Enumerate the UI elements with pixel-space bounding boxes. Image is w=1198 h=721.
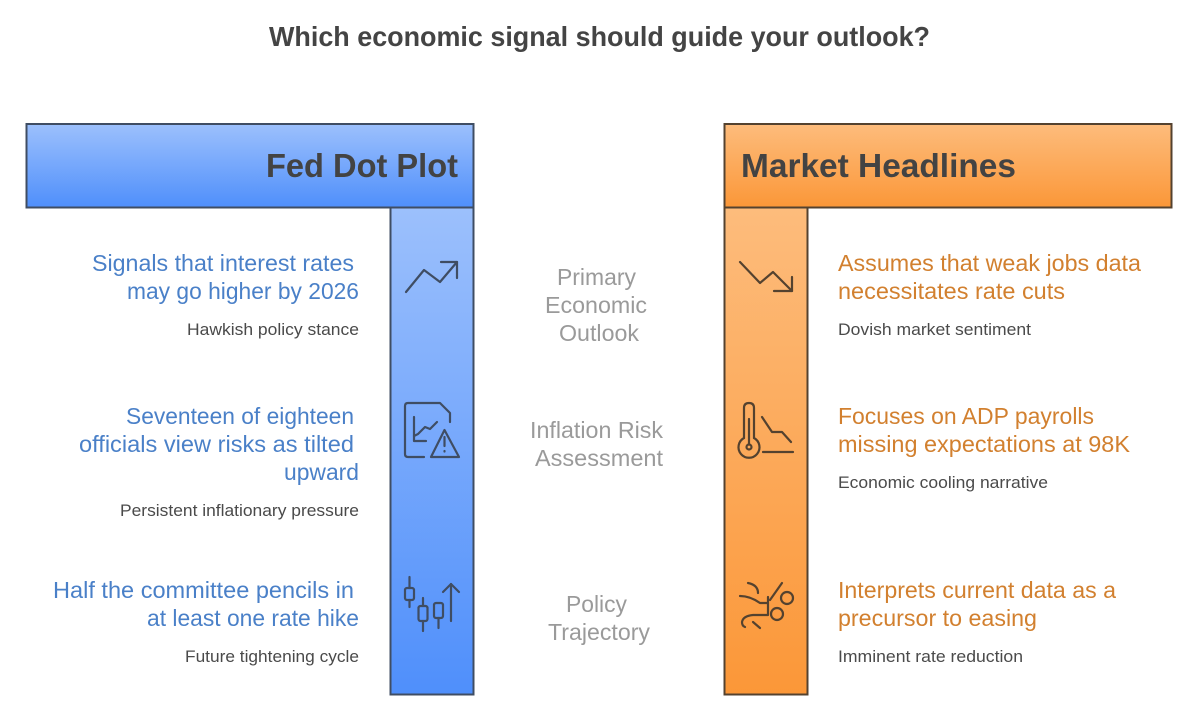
text block: rates higher: Hawkish policy stance (187, 320, 359, 339)
text block: half the committee (53, 577, 359, 666)
label: Policy Trajectory: Policy (566, 591, 627, 617)
label: Inflation Risk Assessment (530, 417, 664, 471)
icon: chart document with warning (405, 403, 459, 457)
icon: candlesticks with up arrow (405, 577, 459, 631)
label: Primary Economic Outlook: Outlook (559, 320, 640, 346)
panel: Fed Dot Plot (26, 124, 474, 694)
text block: ADP payrolls (838, 403, 1131, 492)
icon: percent with swirling lines (740, 583, 793, 628)
blue vertical bar (390, 207, 474, 694)
label: Primary Economic Outlook: Primary (557, 264, 636, 290)
text block: ADP payrolls: missing expectations at 98K (838, 431, 1131, 457)
text block: ADP payrolls: Focuses on ADP payrolls (838, 403, 1094, 429)
blue header bar (26, 124, 474, 208)
panel: Market Headlines (724, 124, 1172, 694)
orange vertical bar (724, 207, 808, 694)
label: Primary Economic Outlook: Economic (545, 292, 647, 318)
heading: Market Headlines: Market Headlines (741, 147, 1016, 184)
text block: half the committee: Future tightening cycle (185, 647, 359, 666)
text block: weak jobs data (838, 250, 1141, 339)
label: Policy Trajectory: Trajectory (548, 619, 651, 645)
orange header bar (724, 124, 1172, 208)
panel: center criteria (530, 264, 664, 645)
title: Which economic signal should guide your outlook? (269, 21, 930, 52)
text block: seventeen of eighteen: officials view risks as tilted (79, 431, 354, 457)
text block: precursor to easing: Imminent rate reduction (838, 647, 1023, 666)
text block: precursor to easing (838, 577, 1116, 666)
label: Primary Economic Outlook (545, 264, 647, 346)
icon: rising trend arrow (406, 262, 457, 292)
text block: weak jobs data: Dovish market sentiment (838, 320, 1031, 339)
text block: half the committee: at least one rate hike (147, 605, 359, 631)
text block: seventeen of eighteen: Persistent inflationary pressure (120, 501, 359, 520)
heading: Fed Dot Plot: Fed Dot Plot (266, 147, 458, 184)
text block: seventeen of eighteen: Seventeen of eighteen (126, 403, 354, 429)
text block: ADP payrolls: Economic cooling narrative (838, 473, 1048, 492)
text block: weak jobs data: Assumes that weak jobs data (838, 250, 1141, 276)
text block: seventeen of eighteen: upward (284, 459, 359, 485)
text block: precursor to easing: Interprets current data as a (838, 577, 1116, 603)
label: Inflation Risk Assessment: Inflation Risk (530, 417, 663, 443)
label: Inflation Risk Assessment: Assessment (535, 445, 664, 471)
text block: rates higher (92, 250, 359, 339)
text block: rates higher: may go higher by 2026 (127, 278, 359, 304)
text block: precursor to easing: precursor to easing (838, 605, 1037, 631)
text block: rates higher: Signals that interest rates (92, 250, 354, 276)
text block: half the committee: Half the committee pencils in (53, 577, 354, 603)
text block: seventeen of eighteen (79, 403, 359, 520)
icon: falling trend arrow (740, 262, 792, 291)
text block: weak jobs data: necessitates rate cuts (838, 278, 1065, 304)
icon: thermometer with falling line (739, 403, 793, 458)
label: Policy Trajectory (548, 591, 651, 645)
